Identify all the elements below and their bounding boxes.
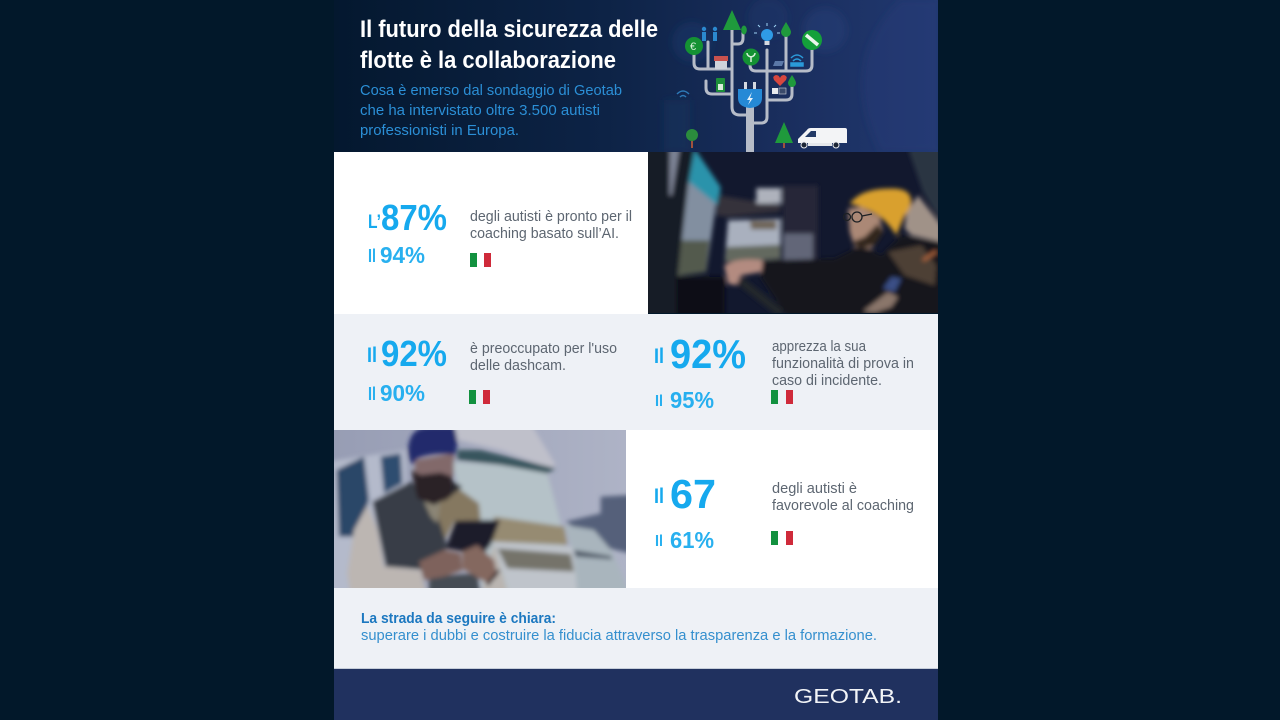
stat: 92 percent appreciate: Il [654,345,664,368]
text: AI coaching [470,208,632,242]
icon: small leaf left [741,26,747,34]
conclusion text: superare i dubbi e costruire la fiducia attraverso la trasparenza e la formazione. [361,627,877,644]
icon: faint wifi [677,91,689,97]
photo: truck driver in cab [648,152,938,313]
text: incident proof: caso di incidente. [772,372,882,389]
icon: ground tree [775,122,793,148]
text: favourable to coaching [772,480,914,514]
icon: van [798,128,847,148]
title [360,16,658,74]
stat: 67: Il [654,485,664,508]
icon: devices [772,88,786,94]
text: AI coaching: coaching basato sull’AI. [470,225,619,242]
text: incident proof [772,338,914,389]
header decoration [674,12,842,60]
stat: Italy 61 percent: 61% [670,527,714,553]
icon: technology tree [677,10,847,152]
panel: dashcam stats [334,314,938,430]
subtitle [360,82,622,139]
panel: AI coaching stat [334,152,648,314]
driver's glasses [844,212,872,222]
icon: Italian flag [771,390,793,404]
text: incident proof: apprezza la sua [772,338,867,355]
icon: solar panel [773,61,784,66]
icon: fuel pump [716,78,725,92]
icon: bulb [754,23,780,45]
stat: 87 percent: L’ [368,212,381,233]
text: dashcam concern: delle dashcam. [470,357,566,374]
icon: wifi [791,55,803,66]
title: Il futuro della sicurezza delle [360,16,658,43]
panel: coaching stat [626,430,938,588]
photo: driver with tablet [334,430,626,588]
icon: plug [738,82,762,108]
text: incident proof: funzionalità di prova in [772,355,914,372]
stat: Italy 90 percent: 90% [380,380,425,406]
icon: Italian flag [470,253,491,267]
icon: euro circle: € [690,41,696,53]
stat: 92 percent concerned: Il [367,344,377,367]
icon: top tree [723,10,741,30]
icon: link circle [802,30,822,50]
icon: euro circle [685,37,703,55]
panel: footer [334,668,938,720]
text: AI coaching: degli autisti è pronto per il [470,208,632,225]
stat: Italy 94 percent: 94% [380,242,425,268]
stat: Italy 90 percent: Il [368,384,376,404]
logo: Geotab: GEOTAB. [794,686,902,708]
text: favourable to coaching: favorevole al coaching [772,497,914,514]
stat: 92 percent concerned: 92% [381,333,447,374]
stat: Italy 95 percent: 95% [670,387,714,413]
panel: conclusion [334,588,938,668]
text: dashcam concern [470,340,617,374]
stat: 87 percent: 87% [381,197,447,238]
icon: shop [714,56,728,69]
title: flotte è la collaborazione [360,47,616,74]
icon: top leaf right [781,22,791,37]
stat: Italy 94 percent: Il [368,246,376,266]
stat: 67: 67 [670,471,716,517]
icon: people [702,27,717,41]
panel: header [334,0,938,152]
subtitle: che ha intervistato oltre 3.500 autisti [360,102,600,119]
text: dashcam concern: è preoccupato per l'uso [470,340,617,357]
subtitle: Cosa è emerso dal sondaggio di Geotab [360,82,622,99]
icon: sprout circle [742,48,760,66]
icon: heart [773,75,787,86]
icon: small tree left [686,129,698,148]
icon: Italian flag [771,531,793,545]
stat: Italy 61 percent: Il [655,533,663,550]
stat: 92 percent appreciate: 92% [670,331,746,377]
subtitle: professionisti in Europa. [360,122,519,139]
text: favourable to coaching: degli autisti è [772,480,857,497]
conclusion heading: La strada da seguire è chiara: [361,610,556,627]
icon: Italian flag [469,390,490,404]
stat: Italy 95 percent: Il [655,393,663,410]
icon: small leaf [788,75,796,87]
